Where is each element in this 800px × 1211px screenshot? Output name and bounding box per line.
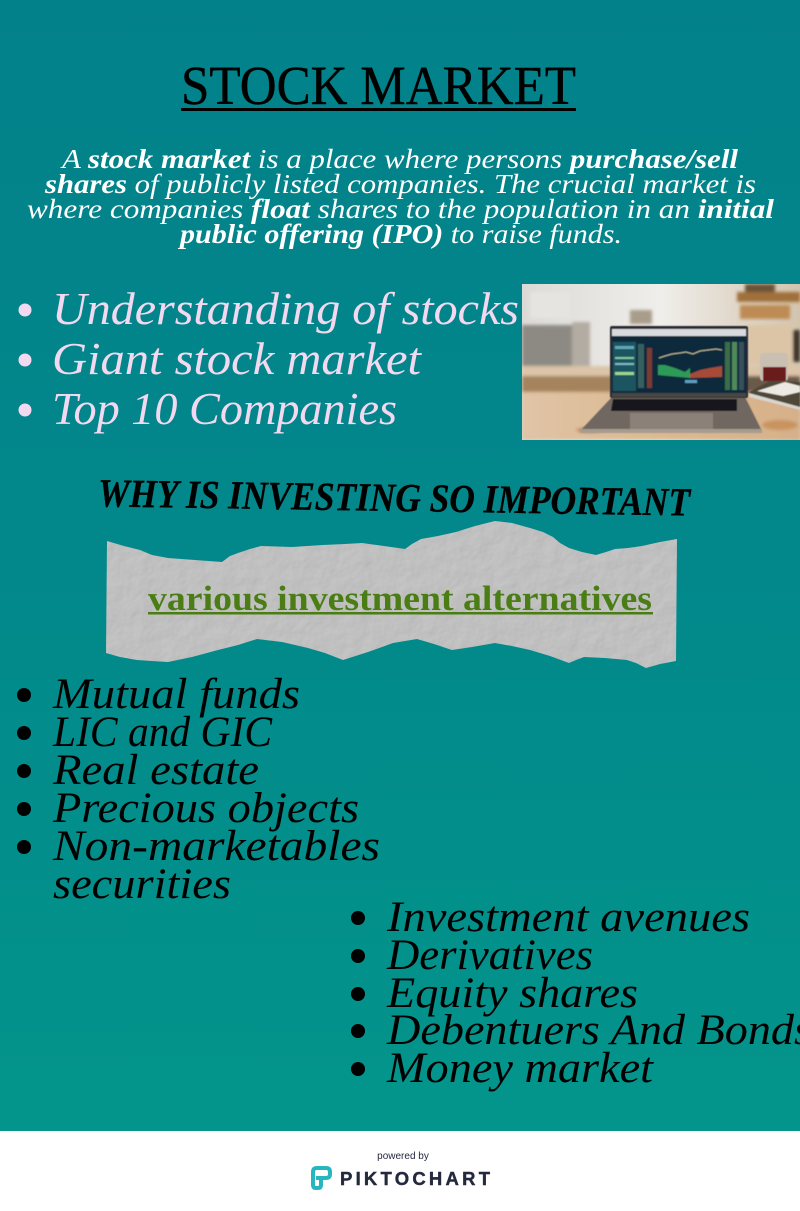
footer panel (0, 1131, 800, 1211)
heading: why is investing so important: WHY IS INVESTING SO IMPORTANT (98, 470, 692, 525)
left investment list: securities (53, 861, 231, 908)
topic bullet list (18, 283, 519, 434)
right investment list: Investment avenues (386, 894, 750, 941)
intro paragraph: A stock market is a place where persons purchase/sell (60, 144, 739, 174)
notebook (749, 381, 800, 409)
right investment list (351, 894, 800, 1092)
right investment list: Debentuers And Bonds (386, 1007, 800, 1054)
laptop base (580, 397, 762, 431)
footer wordmark: PIKTOCHART (340, 1168, 491, 1189)
topic bullet list: Understanding of stocks (52, 283, 519, 334)
torn paper strip (106, 521, 677, 668)
photo: laptop showing stock charts on a desk (522, 284, 800, 440)
right investment list: Equity shares (386, 970, 638, 1017)
intro paragraph (27, 144, 775, 249)
paper caption: various investment alternatives (148, 579, 652, 618)
intro paragraph: where companies float shares to the population in an initial (27, 194, 775, 224)
left investment list: Mutual funds (52, 671, 300, 718)
intro paragraph: public offering (IPO) to raise funds. (178, 219, 622, 249)
topic bullet list: Top 10 Companies (52, 383, 397, 434)
laptop screen (610, 326, 748, 398)
title: STOCK MARKET (181, 55, 576, 116)
left investment list: Non-marketables (52, 823, 380, 870)
left investment list: Real estate (52, 747, 259, 794)
icon: piktochart logo (313, 1168, 330, 1188)
left investment list: Precious objects (52, 785, 359, 832)
right investment list: Derivatives (386, 932, 593, 979)
jar (760, 353, 788, 381)
right investment list: Money market (386, 1045, 654, 1092)
footer credit text: powered by (377, 1151, 429, 1162)
intro paragraph: shares of publicly listed companies. The crucial market is (44, 169, 756, 199)
left investment list (17, 671, 380, 908)
left investment list: LIC and GIC (52, 709, 273, 756)
topic bullet list: Giant stock market (52, 333, 422, 384)
